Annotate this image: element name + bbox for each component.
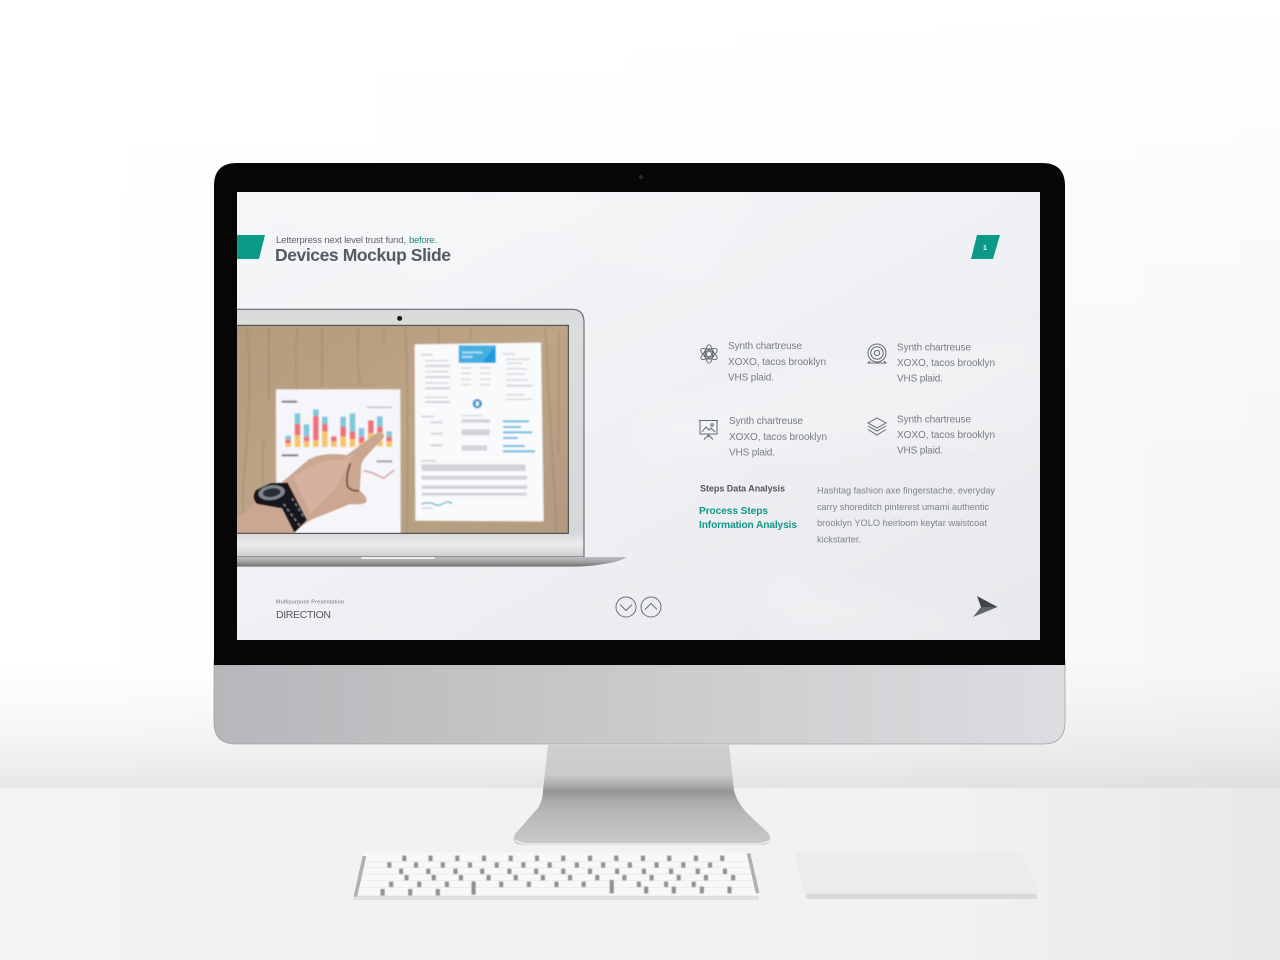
webcam bbox=[639, 175, 643, 179]
subtitle: before. bbox=[409, 235, 437, 246]
feature text bbox=[729, 416, 827, 458]
monitor chin bbox=[214, 660, 1065, 744]
laptop screen frame bbox=[230, 325, 568, 533]
resume text lines bbox=[421, 353, 532, 509]
subtitle: Letterpress next level trust fund, bbox=[276, 235, 406, 246]
background: desk bbox=[0, 788, 1280, 960]
keyboard row gaps bbox=[357, 861, 756, 887]
keyboard side edges bbox=[355, 853, 758, 897]
analysis highlight bbox=[699, 506, 797, 531]
feature: presentation board bbox=[699, 416, 827, 458]
feature: layers bbox=[868, 414, 995, 456]
footer label: DIRECTION bbox=[276, 609, 331, 621]
slide background facets bbox=[237, 192, 1040, 640]
laptop lid bbox=[230, 309, 584, 557]
keyboard front edge bbox=[354, 896, 759, 900]
slide background bbox=[237, 192, 1040, 640]
trackpad surface bbox=[797, 853, 1037, 894]
laptop base bbox=[230, 557, 627, 567]
laptop camera bbox=[397, 316, 402, 321]
resume skill bars bbox=[503, 420, 535, 452]
line chart bbox=[364, 470, 394, 478]
feature text: Synth chartreuse bbox=[897, 414, 971, 426]
resume header bbox=[459, 345, 496, 363]
laptop mockup bbox=[230, 309, 627, 567]
resume badge bbox=[473, 399, 482, 408]
nav arrow up bbox=[641, 597, 661, 617]
analysis paragraph bbox=[817, 486, 995, 544]
monitor stand bbox=[514, 745, 770, 845]
laptop screen photo bbox=[230, 320, 574, 540]
page number tag: 1 bbox=[983, 243, 987, 252]
feature text: Synth chartreuse bbox=[728, 341, 802, 352]
wood grain bbox=[243, 326, 559, 533]
chart paper bbox=[276, 389, 401, 540]
analysis paragraph: kickstarter. bbox=[817, 534, 861, 544]
icon: presentation board bbox=[699, 420, 718, 440]
feature text: XOXO, tacos brooklyn bbox=[897, 430, 995, 441]
icon: target bbox=[868, 344, 886, 363]
screen slide bbox=[230, 192, 1040, 640]
resume signature bbox=[422, 502, 452, 505]
analysis highlight: Process Steps bbox=[699, 506, 768, 517]
laptop notch bbox=[361, 557, 435, 559]
feature text: VHS plaid. bbox=[728, 372, 774, 384]
feature text bbox=[897, 414, 995, 456]
hand pointing bbox=[230, 432, 384, 537]
keyboard key gaps bbox=[383, 856, 733, 896]
analysis highlight: Information Analysis bbox=[699, 520, 797, 531]
feature text: VHS plaid. bbox=[897, 374, 943, 384]
stand base edge bbox=[515, 840, 770, 844]
feature: atom bbox=[699, 341, 826, 384]
feature text bbox=[728, 341, 826, 384]
paper plane logo bbox=[973, 596, 998, 617]
trackpad edge bbox=[806, 894, 1037, 899]
wood table bbox=[230, 320, 574, 540]
page number tag bbox=[971, 235, 1000, 259]
feature text: Synth chartreuse bbox=[729, 416, 803, 427]
feature: target bbox=[868, 342, 995, 384]
slide title: Devices Mockup Slide bbox=[275, 245, 451, 265]
footer label bbox=[276, 600, 344, 621]
feature text bbox=[897, 342, 995, 384]
analysis paragraph: carry shoreditch pinterest umami authentic bbox=[817, 502, 989, 512]
monitor bbox=[214, 163, 1065, 845]
analysis paragraph: brooklyn YOLO heirloom keytar waistcoat bbox=[817, 518, 987, 528]
icon: layers bbox=[868, 418, 886, 435]
keyboard bbox=[354, 853, 759, 900]
analysis paragraph: Hashtag fashion axe fingerstache, everyday bbox=[817, 486, 995, 496]
nav arrow down bbox=[616, 597, 636, 617]
feature text: Synth chartreuse bbox=[897, 342, 971, 354]
feature text: VHS plaid. bbox=[729, 448, 775, 458]
analysis heading: Steps Data Analysis bbox=[700, 484, 785, 494]
feature text: XOXO, tacos brooklyn bbox=[729, 432, 827, 443]
icon: atom flower bbox=[699, 345, 719, 363]
resume paper bbox=[415, 343, 544, 521]
feature text: XOXO, tacos brooklyn bbox=[897, 358, 995, 369]
corner tag left bbox=[237, 235, 265, 259]
bar chart bbox=[282, 401, 392, 462]
wristwatch bbox=[254, 483, 307, 533]
footer label: Multipurpose Presentation bbox=[276, 600, 344, 606]
feature text: XOXO, tacos brooklyn bbox=[728, 357, 826, 368]
feature text: VHS plaid. bbox=[897, 446, 943, 456]
monitor bezel bbox=[214, 163, 1065, 665]
trackpad bbox=[797, 853, 1037, 899]
keyboard body bbox=[354, 853, 759, 897]
